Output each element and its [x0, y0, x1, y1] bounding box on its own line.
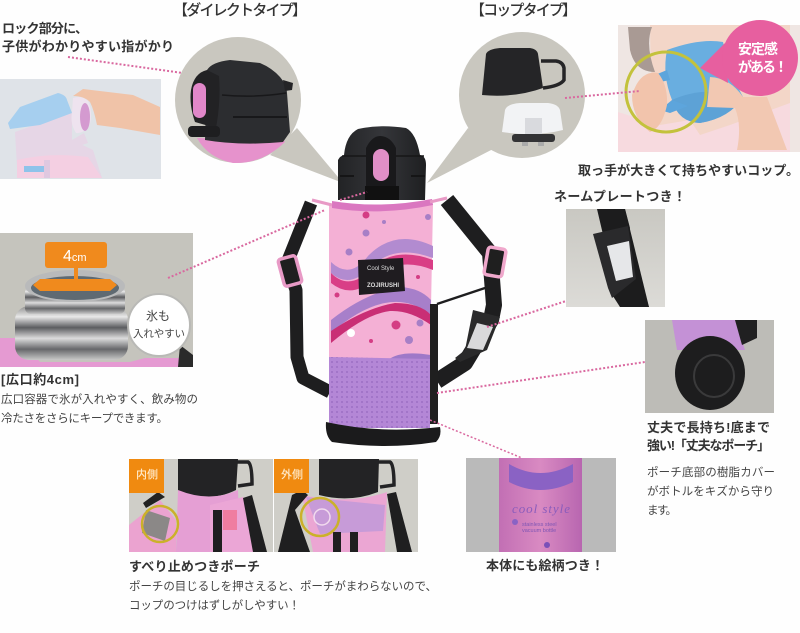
text: durable pouch heading [647, 420, 770, 453]
text: durable pouch heading: 丈夫で長持ち!底まで [647, 420, 770, 435]
title: cup type: 【コップタイプ】 [470, 2, 577, 19]
pouch waves [331, 239, 433, 280]
photo: printed bottle body: vacuum bottle [522, 528, 556, 534]
title: direct type: 【ダイレクトタイプ】 [173, 1, 307, 19]
dotted leader: base to bottom photo [437, 362, 645, 393]
text: non-slip body: コップのつけはずしがしやすい！ [129, 598, 300, 612]
photo: printed bottle body [466, 458, 616, 552]
callout: ice: 入れやすい [133, 328, 185, 340]
strap side [430, 304, 438, 424]
name plate on strap [455, 310, 500, 362]
text: durable pouch heading: 強い!「丈夫なポーチ」 [647, 438, 770, 453]
highlight ring [142, 506, 178, 542]
callout: stable: がある！ [738, 59, 788, 75]
photo: printed bottle body: stainless steel [522, 522, 557, 528]
buckles [278, 255, 302, 287]
pouch badge [358, 258, 405, 295]
text: non-slip body [129, 579, 437, 612]
pouch lower [329, 357, 430, 428]
dotted leader: cup to photo [565, 91, 640, 98]
text: wide mouth body: 冷たさをさらにキープできます。 [1, 412, 168, 425]
icon: white lid part [502, 103, 563, 146]
highlight ring [626, 52, 706, 132]
photo: hand opening lid [0, 79, 161, 179]
text: lock finger grip: ロック部分に、 [2, 21, 88, 36]
caption: printed body: 本体にも絵柄つき！ [486, 558, 604, 573]
zoom bubble: direct lid [175, 37, 343, 183]
text: non-slip body: ポーチの目じるしを押さえると、ポーチがまわらないので、 [129, 579, 437, 593]
strap left [287, 203, 330, 392]
text: wide mouth heading: [広口約4cm] [1, 372, 79, 387]
photo: outside of pouch [274, 459, 418, 552]
callout: stable: 安定感 [738, 41, 778, 57]
dotted leader: base to body photo [430, 420, 522, 458]
dotted leader: strap to name plate [487, 301, 566, 327]
pouch upper [329, 204, 433, 360]
callout: 4cm [33, 242, 117, 291]
dotted leader: lock to lid [68, 57, 197, 75]
photo: wide mouth [0, 233, 193, 367]
text: durable pouch body: ます。 [647, 504, 677, 517]
badge [274, 459, 309, 493]
caption: cup handle: 取っ手が大きくて持ちやすいコップ。 [578, 163, 799, 178]
callout: ice: 氷も [146, 309, 170, 323]
text: wide mouth body [1, 392, 198, 425]
pouch dots [334, 212, 431, 344]
strap right [437, 200, 494, 381]
bottle in pouch [278, 126, 506, 446]
text: lock finger grip [2, 21, 174, 54]
text: durable pouch body [647, 465, 775, 517]
pouch base [326, 422, 440, 446]
callout: 4cm: 4cm [63, 248, 87, 265]
callout: stable [700, 20, 798, 96]
photo: inside of pouch [129, 459, 273, 552]
zoom bubble: cup lid [427, 32, 585, 183]
highlight ring [301, 498, 339, 536]
pouch badge: ZOJIRUSHI [367, 283, 399, 289]
text: durable pouch body: ポーチ底部の樹脂カバー [647, 465, 775, 479]
text: lock finger grip: 子供がわかりやすい指がかり [2, 39, 174, 54]
icon: black cup [482, 48, 564, 96]
photo: pouch bottom [645, 320, 774, 413]
text: durable pouch body: がボトルをキズから守り [647, 484, 774, 498]
text: non-slip heading: すべり止めつきポーチ [129, 559, 260, 574]
photo: child drinking from cup [618, 20, 800, 152]
callout: ice [128, 294, 190, 356]
dotted leader: mouth to bottle [168, 192, 367, 278]
text: wide mouth body: 広口容器で氷が入れやすく、飲み物の [1, 392, 198, 406]
pouch badge: Cool Style [367, 266, 395, 272]
badge [129, 459, 164, 493]
cap [338, 126, 426, 200]
caption: name plate: ネームプレートつき！ [554, 189, 686, 204]
photo: name plate [566, 209, 665, 307]
badge: 外側 [281, 467, 303, 481]
badge: 内側 [136, 467, 158, 481]
photo: printed bottle body: cool style [512, 501, 570, 516]
